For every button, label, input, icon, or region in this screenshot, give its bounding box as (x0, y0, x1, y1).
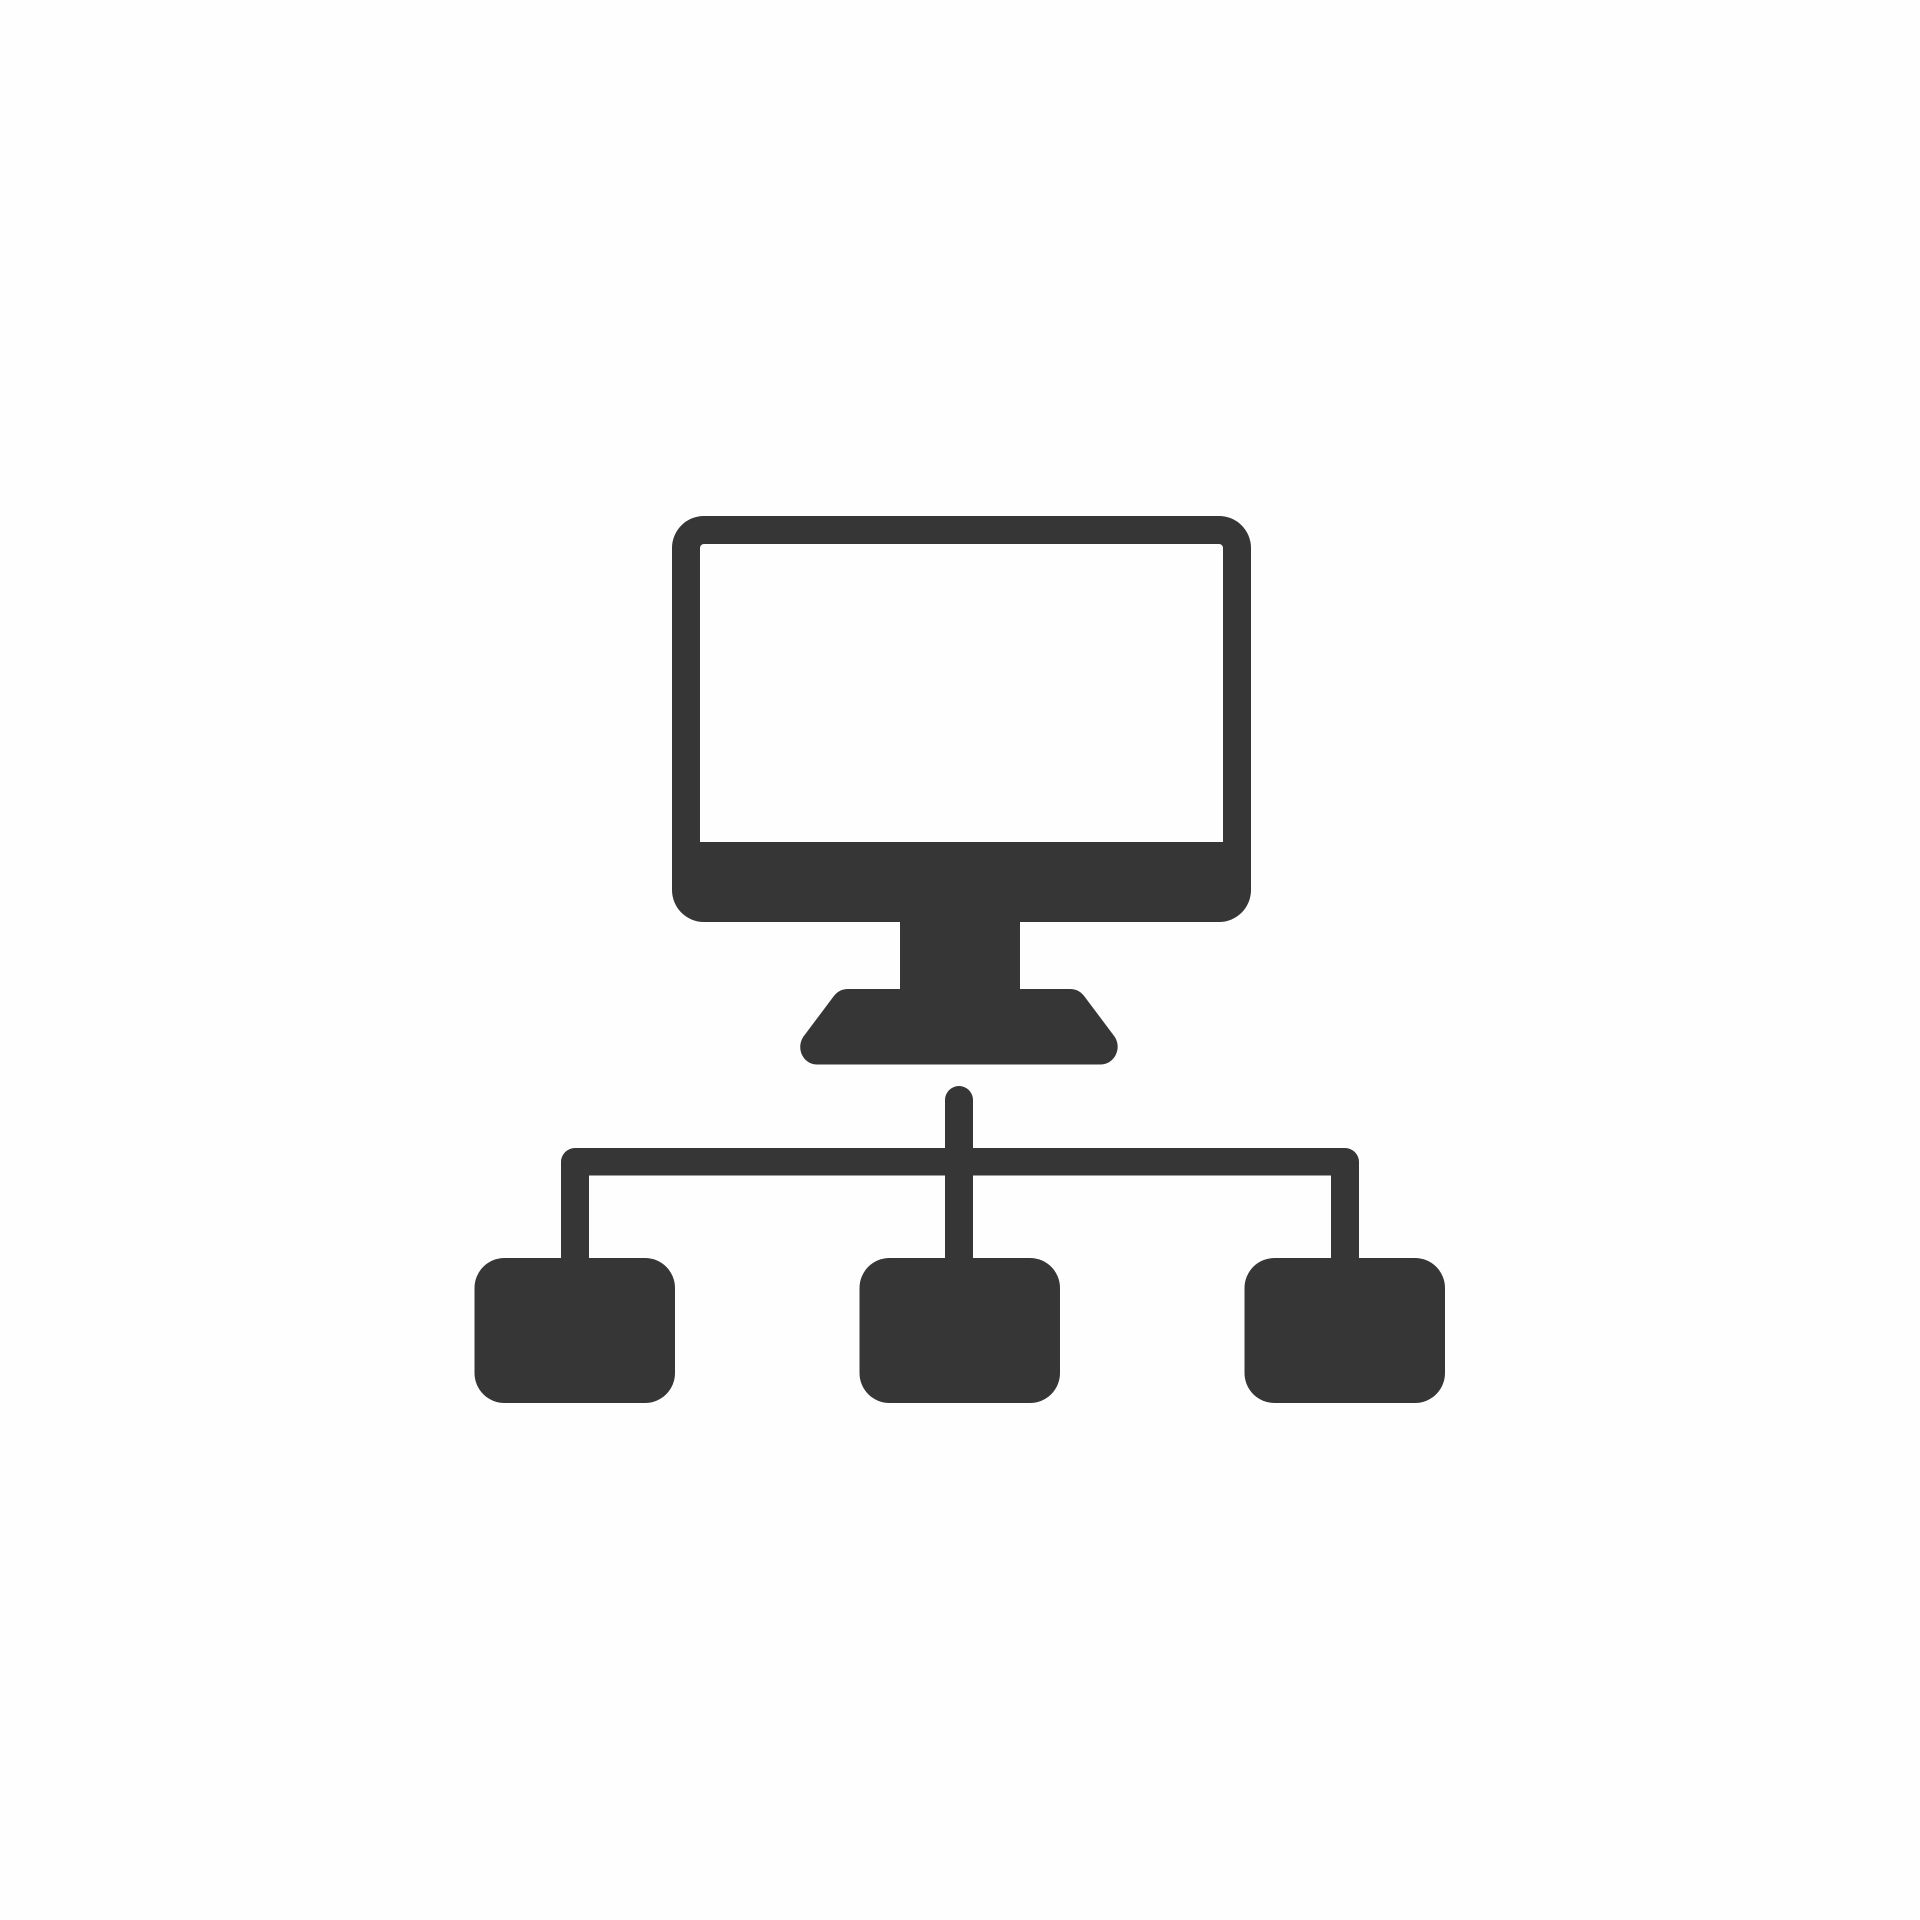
node: right (1244, 1258, 1445, 1403)
monitor neck (900, 915, 1020, 995)
monitor base (800, 989, 1118, 1064)
node: centre (860, 1258, 1060, 1403)
horizontal connector with left and right drops (561, 1148, 1359, 1270)
monitor body with screen (672, 516, 1251, 922)
network nodes (474, 1258, 1445, 1403)
connector lines (561, 1086, 1359, 1270)
icon: desktop monitor (672, 516, 1251, 1064)
central vertical connector (945, 1086, 973, 1270)
node: left (474, 1258, 675, 1403)
